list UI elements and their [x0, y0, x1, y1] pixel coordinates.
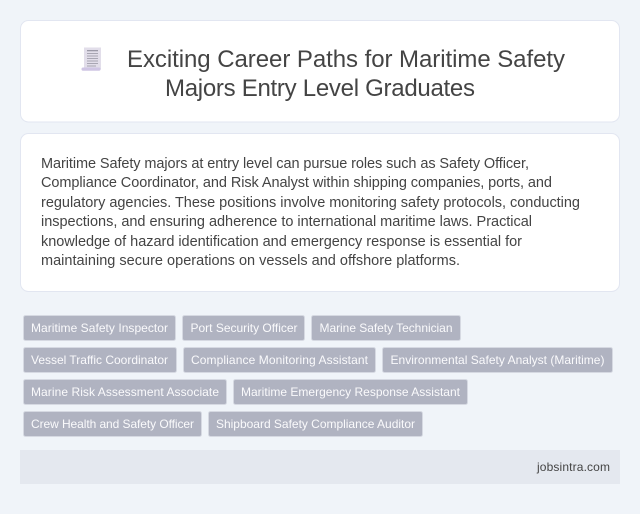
tag: Marine Risk Assessment Associate [31, 385, 219, 399]
tag: Maritime Emergency Response Assistant [241, 385, 461, 399]
job tags [24, 316, 612, 436]
tag: Vessel Traffic Coordinator [31, 353, 168, 367]
description text: Compliance Coordinator, and Risk Analyst within shipping companies, ports, and [41, 175, 552, 191]
tag: Shipboard Safety Compliance Auditor [216, 417, 415, 431]
tag: Port Security Officer [190, 321, 298, 335]
tag: Compliance Monitoring Assistant [191, 353, 369, 367]
description text: maintaining secure operations on vessels and offshore platforms. [41, 253, 460, 269]
tag [182, 316, 304, 340]
source credit: jobsintra.com [536, 460, 610, 474]
tag: Crew Health and Safety Officer [31, 417, 194, 431]
title: Majors Entry Level Graduates [165, 75, 475, 102]
panel: description [20, 134, 620, 292]
tag [312, 316, 460, 340]
title: Exciting Career Paths for Maritime Safety [127, 46, 565, 73]
description text: regulatory agencies. These positions involve monitoring safety protocols, conducting [41, 195, 580, 211]
header panel [20, 20, 620, 122]
tag [184, 348, 376, 372]
title [127, 46, 565, 102]
tag: Maritime Safety Inspector [31, 321, 168, 335]
tag: Environmental Safety Analyst (Maritime) [390, 353, 604, 367]
tag [24, 348, 176, 372]
tag [24, 316, 176, 340]
tag [382, 348, 612, 372]
tag: Marine Safety Technician [320, 321, 452, 335]
footer [20, 450, 620, 484]
icon: document scroll [82, 48, 101, 71]
description text: knowledge of hazard identification and emergency response is essential for [41, 234, 522, 250]
description text [41, 156, 580, 269]
description text: inspections, and ensuring adherence to international maritime laws. Practical [41, 214, 532, 230]
tag [24, 412, 202, 436]
tag [234, 380, 468, 404]
tag [24, 380, 226, 404]
tag [208, 412, 422, 436]
description text: Maritime Safety majors at entry level can pursue roles such as Safety Officer, [41, 156, 529, 172]
